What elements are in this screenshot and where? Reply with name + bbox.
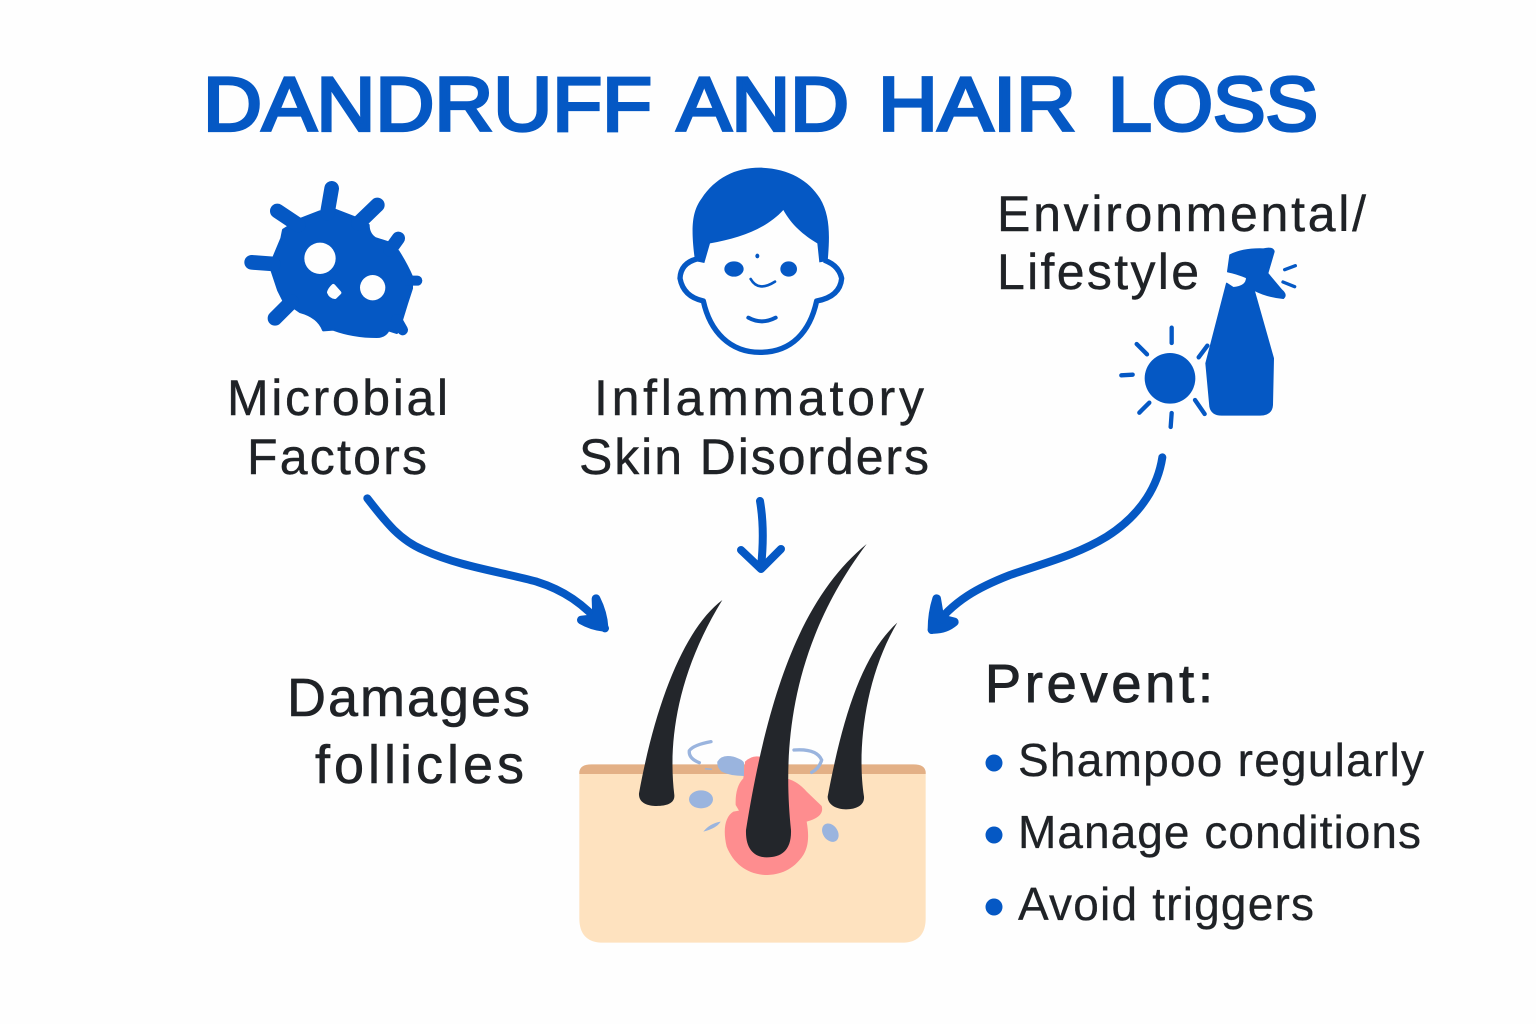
skin surface band xyxy=(579,764,926,774)
skin xyxy=(579,772,926,943)
bullet: Avoid triggers: Avoid triggers xyxy=(1018,878,1314,930)
title: LOSS xyxy=(1108,62,1318,148)
list: prevention tips xyxy=(986,734,1424,930)
icon: microbe xyxy=(252,188,417,337)
label: Environmental/Lifestyle: Environmental/ xyxy=(997,186,1366,242)
icon: face xyxy=(680,168,842,352)
title: HAIR xyxy=(878,62,1076,148)
label: Inflammatory Skin Disorders: Inflammatory xyxy=(594,370,924,426)
diagram: scalp and hair follicles xyxy=(579,544,926,943)
label: Damages follicles xyxy=(287,668,530,795)
arrow: environmental to follicle xyxy=(932,457,1162,630)
dandruff flakes xyxy=(689,742,842,845)
title xyxy=(203,62,1318,148)
bullet: Manage conditions: Manage conditions xyxy=(1018,806,1421,858)
inflamed follicle xyxy=(725,756,822,875)
arrow: inflammatory to follicle xyxy=(741,501,781,569)
label: Damages follicles: follicles xyxy=(315,735,524,795)
title: AND xyxy=(677,62,849,148)
label: Microbial Factors: Microbial xyxy=(227,370,448,426)
label: Inflammatory Skin Disorders: Skin Disorders xyxy=(579,429,929,485)
arrow: microbial to follicle xyxy=(367,498,605,628)
label: Environmental/Lifestyle: Lifestyle xyxy=(997,244,1199,300)
label: Inflammatory Skin Disorders xyxy=(579,370,929,485)
heading: Prevent: Prevent: xyxy=(985,654,1213,714)
title: DANDRUFF xyxy=(203,62,652,148)
label: Damages follicles: Damages xyxy=(287,668,530,728)
bullet: Shampoo regularly: Shampoo regularly xyxy=(1018,734,1424,786)
label: Environmental/Lifestyle xyxy=(997,186,1366,300)
icon: spray bottle and sun xyxy=(1121,248,1295,427)
label: Microbial Factors: Factors xyxy=(247,429,427,485)
label: Microbial Factors xyxy=(227,370,448,485)
hair strands xyxy=(639,544,897,857)
